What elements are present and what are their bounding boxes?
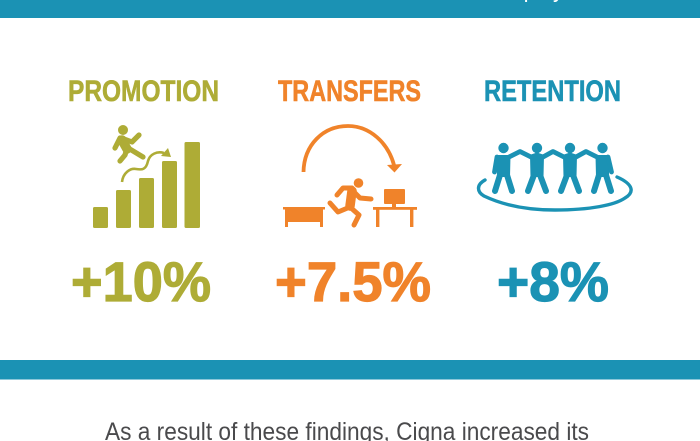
panel: transfers <box>275 75 431 313</box>
icon: linked people in a circle <box>478 143 631 210</box>
icon: rising bars with climbing figure <box>93 125 200 228</box>
heading: promotion: PROMOTION <box>68 75 219 108</box>
heading: retention: RETENTION <box>484 75 621 108</box>
stat: transfers +7.5%: +7.5% <box>275 250 431 313</box>
stat: retention +8%: +8% <box>497 250 609 313</box>
heading: transfers: TRANSFERS <box>278 75 421 108</box>
stat: promotion +10%: +10% <box>71 250 211 313</box>
panel: promotion <box>68 75 219 313</box>
icon: person running between desks <box>283 126 417 227</box>
top banner <box>0 0 700 18</box>
bottom banner <box>0 360 700 380</box>
panel: retention <box>478 75 631 313</box>
